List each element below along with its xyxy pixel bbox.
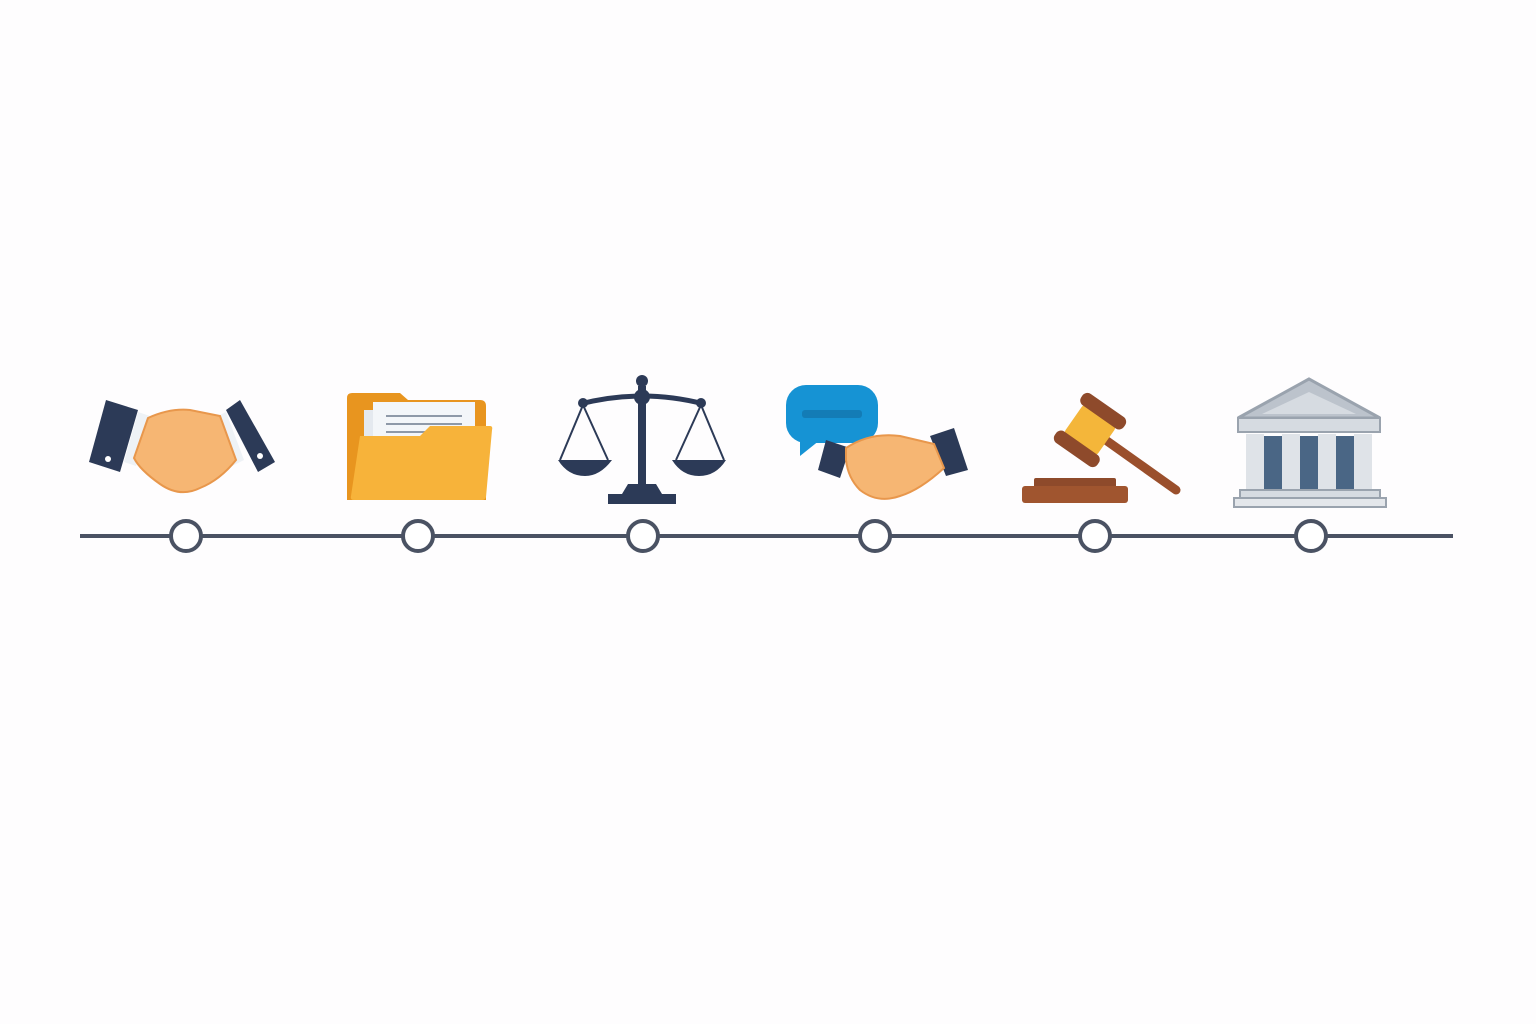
node 2	[403, 521, 433, 551]
icon: scales	[558, 375, 726, 504]
icon: speech bubble handshake	[786, 385, 968, 499]
icon: courthouse	[1234, 379, 1386, 507]
node 6	[1296, 521, 1326, 551]
node 3	[628, 521, 658, 551]
node 5	[1080, 521, 1110, 551]
node 1	[171, 521, 201, 551]
node 4	[860, 521, 890, 551]
icon: gavel	[1022, 391, 1176, 503]
icon: handshake	[89, 400, 275, 492]
timeline	[80, 521, 1453, 551]
icon: folder	[347, 393, 492, 500]
